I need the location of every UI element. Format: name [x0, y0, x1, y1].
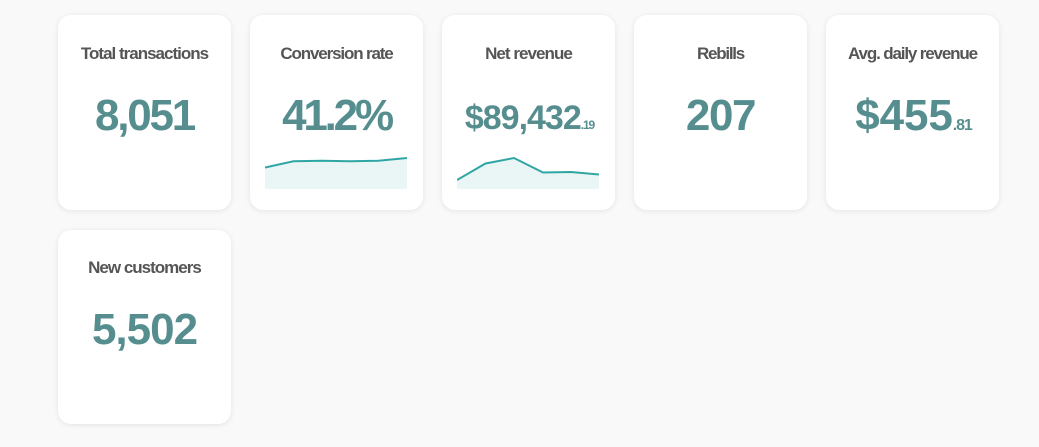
panel: average daily revenue	[826, 15, 999, 210]
panel: rebills	[634, 15, 807, 210]
heading: conversion rate: Conversion rate	[280, 44, 393, 63]
heading: total transactions: Total transactions	[81, 44, 208, 63]
value: average daily revenue: $455.81	[855, 91, 972, 140]
value: total transactions: 8,051	[95, 91, 194, 140]
heading: new customers: New customers	[88, 258, 201, 277]
panel: conversion rate	[250, 15, 423, 210]
panel: net revenue	[442, 15, 615, 210]
chart: net revenue sparkline	[457, 157, 599, 189]
panel: new customers	[58, 230, 231, 424]
chart: conversion rate sparkline	[265, 157, 407, 189]
value: new customers: 5,502	[92, 305, 197, 354]
value: net revenue: $89,432.19	[465, 99, 594, 137]
heading: net revenue: Net revenue	[485, 44, 572, 63]
panel: total transactions	[58, 15, 231, 210]
value: rebills: 207	[686, 91, 755, 140]
value: conversion rate: 41.2%	[282, 91, 391, 140]
heading: average daily revenue: Avg. daily revenue	[848, 44, 977, 63]
heading: rebills: Rebills	[697, 44, 744, 63]
